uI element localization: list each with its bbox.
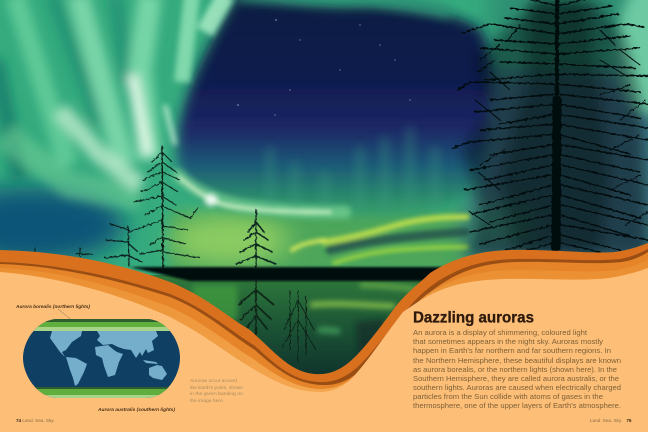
- map caption: the image here.: [190, 398, 224, 403]
- wave band: light orange: [0, 260, 648, 432]
- map caption: in the green banding on: [190, 391, 244, 396]
- photo: aurora sky: [0, 0, 648, 290]
- right sky behind tree: [470, 70, 648, 270]
- map label: aurora borealis: Aurora borealis (northern lights): [15, 304, 90, 309]
- body text: that sometimes appears in the night sky. Auroras mostly: [413, 337, 603, 346]
- body text: the Northern Hemisphere, these beautiful displays are known: [413, 356, 621, 365]
- aurora curtains left: [0, 0, 450, 198]
- wave band: outer orange: [0, 243, 648, 432]
- aurora bands north: [45, 319, 158, 322]
- big pine tree: [452, 0, 648, 255]
- body text: An aurora is a display of shimmering, coloured light: [413, 328, 587, 337]
- body text: Southern Hemisphere, they are called aurora australis, or the: [413, 374, 619, 383]
- body text: [413, 328, 621, 410]
- map caption: the Earth's poles, shown: [190, 385, 244, 390]
- body text: as aurora borealis, or the northern lights (shown here). In the: [413, 365, 617, 374]
- tree line horizon: [130, 267, 445, 281]
- small trees left: [35, 146, 276, 268]
- stars: [237, 19, 411, 116]
- page number right: Land. Sea. Sky. 75: [590, 418, 632, 423]
- map label: aurora australis: Aurora australis (southern lights): [97, 407, 175, 412]
- body text: thermosphere, one of the upper layers of Earth's atmosphere.: [413, 401, 621, 410]
- leader line north: [58, 309, 74, 322]
- body text: particles from the Sun collide with atoms of gases in the: [413, 392, 603, 401]
- aurora bands south: [35, 387, 168, 389]
- reflected trees: [238, 280, 316, 362]
- night sky centre: [177, 0, 491, 215]
- world map: [20, 318, 185, 400]
- page base: [0, 268, 648, 432]
- aurora arc: [178, 130, 467, 263]
- land masses: [50, 331, 167, 386]
- map caption: [190, 378, 244, 403]
- lake reflection: [120, 275, 460, 390]
- page number left: 74 Land. Sea. Sky.: [16, 418, 54, 423]
- map caption: Auroras occur around: [190, 378, 238, 383]
- dark lower left sky: [0, 187, 125, 263]
- body text: southern lights. Auroras are caused when electrically charged: [413, 383, 621, 392]
- wave band: mid orange: [0, 252, 648, 432]
- wave band: dark brown: [0, 249, 648, 432]
- heading: Dazzling auroras: [413, 310, 534, 326]
- lower green glow: [170, 212, 470, 272]
- body text: happen in Earth's far northern and far southern regions. In: [413, 346, 611, 355]
